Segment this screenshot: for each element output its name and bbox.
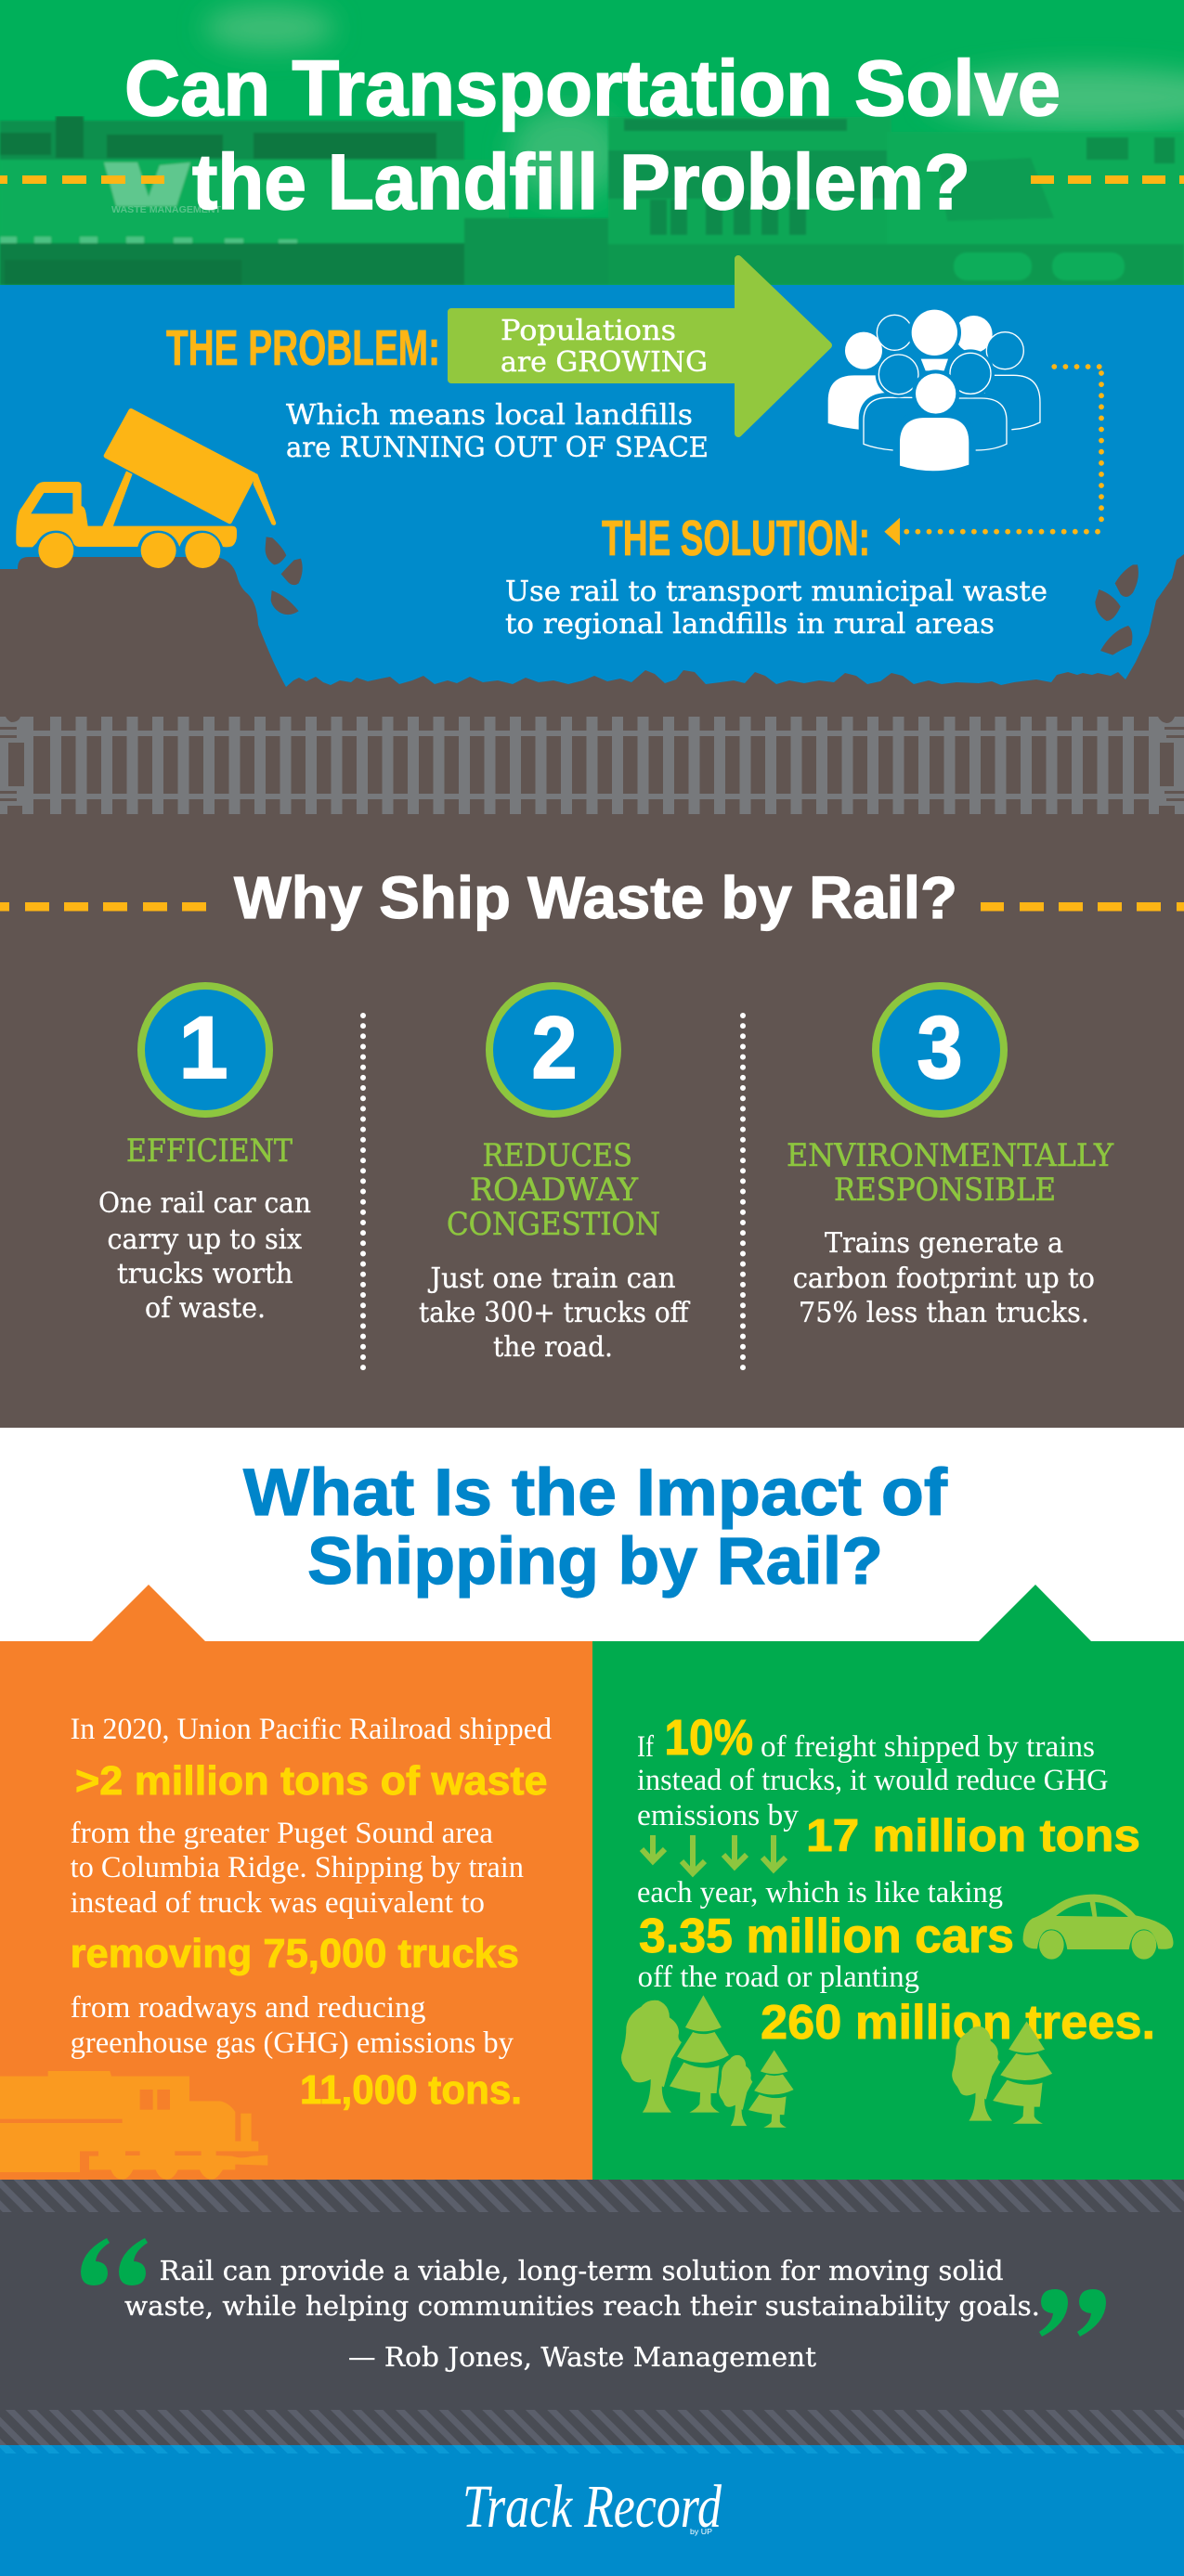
text: green panel highlights: 260 million trees. <box>761 1996 1155 2050</box>
text: quote: Rail can provide a viable, long-term solution for moving solid <box>160 2255 1003 2286</box>
logo: track record by UP: by UP <box>690 2528 712 2536</box>
text: green panel copy: each year, which is like taking <box>637 1876 1003 1909</box>
reason 2: reduces roadway congestion: take 300+ trucks off <box>419 1297 691 1329</box>
reason 2: reduces roadway congestion: CONGESTION <box>447 1206 660 1243</box>
heading: the solution: THE SOLUTION: <box>602 511 870 566</box>
icon: dump truck <box>16 411 276 568</box>
reason 2: reduces roadway congestion: the road. <box>493 1331 613 1364</box>
icon: falling trash bags right <box>1095 564 1138 655</box>
reason 1: efficient: of waste. <box>145 1292 266 1325</box>
reason 2: reduces roadway congestion <box>419 986 691 1364</box>
arrow: populations growing <box>451 259 828 434</box>
heading: what is the impact <box>243 1456 947 1599</box>
reason 3: environmentally responsible: 3 <box>917 999 962 1097</box>
text: orange panel copy: instead of truck was equivalent to <box>71 1886 485 1920</box>
arrow: populations growing: Populations <box>501 315 676 347</box>
reason 3: environmentally responsible <box>787 986 1114 1329</box>
reason 2: reduces roadway congestion: ROADWAY <box>470 1171 639 1209</box>
divider dots <box>740 1016 746 1378</box>
reason 3: environmentally responsible: Trains generate a <box>825 1227 1063 1260</box>
arrow: dotted line from crowd to solution <box>884 367 1101 546</box>
text: quote: — Rob Jones, Waste Management <box>348 2341 816 2373</box>
text: green panel highlights: 10% <box>665 1710 753 1766</box>
text: running out of space <box>286 399 709 464</box>
panel: blue footer <box>0 2445 1184 2576</box>
text: solution description <box>505 576 1047 641</box>
decoration: header dashed road line <box>0 175 1184 184</box>
text: orange panel highlights: >2 million tons of waste <box>75 1758 548 1804</box>
reason 1: efficient: trucks worth <box>117 1258 293 1290</box>
arrow: populations growing: are GROWING <box>501 346 708 379</box>
reason 3: environmentally responsible: 75% less than trucks. <box>799 1297 1089 1329</box>
reason 2: reduces roadway congestion: Just one train can <box>427 1262 676 1295</box>
heading: the problem: THE PROBLEM: <box>166 320 440 376</box>
heading: what is the impact: Shipping by Rail? <box>307 1525 883 1599</box>
text: green panel copy: emissions by <box>637 1799 799 1832</box>
title: Can Transportation Solve <box>124 45 1060 132</box>
railroad track <box>0 717 1184 814</box>
text: green panel highlights: 3.35 million cars <box>639 1909 1014 1963</box>
text: solution description: to regional landfills in rural areas <box>505 608 995 641</box>
panel: header with green locomotive photo: WASTE MANAGEMENT <box>111 205 221 215</box>
panel: white impact heading band <box>0 1428 1184 1641</box>
text: green panel copy: instead of trucks, it would reduce GHG <box>637 1764 1109 1797</box>
reason 3: environmentally responsible: ENVIRONMENTALLY <box>787 1137 1114 1174</box>
text: green panel copy: off the road or planting <box>638 1961 919 1994</box>
text: orange panel highlights <box>71 1758 548 2113</box>
text: running out of space: Which means local landfills <box>286 399 693 432</box>
icon: opening quote marks <box>81 2238 148 2285</box>
panel: brown why ship by rail background <box>0 703 1184 1428</box>
reason 1: efficient: 1 <box>179 999 228 1097</box>
text: orange panel copy: from roadways and reducing <box>71 1991 425 2025</box>
logo: track record by UP: Track Record <box>462 2473 722 2541</box>
icon: down arrows <box>642 1835 786 1873</box>
reason 2: reduces roadway congestion: 2 <box>531 999 578 1097</box>
text: green panel highlights <box>639 1710 1155 2050</box>
panel: green emissions stats <box>592 1585 1184 2180</box>
icon: falling trash bags left <box>266 537 303 615</box>
text: orange panel copy: to Columbia Ridge. Shipping by train <box>71 1851 524 1884</box>
icon: trees right group <box>952 2021 1052 2124</box>
heading: what is the impact: What Is the Impact of <box>243 1456 947 1530</box>
text: orange panel highlights: 11,000 tons. <box>300 2067 522 2113</box>
text: green panel copy: If <box>637 1730 654 1764</box>
icon: trees left group <box>621 1995 794 2128</box>
icon: car <box>1023 1895 1173 1960</box>
panel: orange union pacific stats <box>0 1585 592 2180</box>
text: green panel copy <box>637 1730 1109 1994</box>
reason 2: reduces roadway congestion: REDUCES <box>483 1137 632 1174</box>
text: green panel copy: of freight shipped by trains <box>761 1730 1095 1764</box>
text: quote: waste, while helping communities reach their sustainability goals. <box>124 2290 1040 2322</box>
icon: crowd of people <box>828 306 1040 471</box>
reason 3: environmentally responsible: carbon footprint up to <box>793 1262 1095 1295</box>
text: orange panel copy: greenhouse gas (GHG) emissions by <box>71 2026 514 2060</box>
icon: locomotive silhouette <box>0 2071 267 2180</box>
text: quote <box>124 2255 1040 2373</box>
heading: why ship waste by rail <box>0 864 1184 931</box>
divider dots <box>360 1016 366 1378</box>
reason 1: efficient <box>98 986 311 1325</box>
title <box>124 45 1060 226</box>
reason 3: environmentally responsible: RESPONSIBLE <box>834 1171 1056 1209</box>
panel: header with green locomotive photo <box>0 0 1184 285</box>
title: the Landfill Problem? <box>192 138 970 226</box>
text: green panel highlights: 17 million tons <box>806 1811 1140 1861</box>
text: solution description: Use rail to transport municipal waste <box>505 576 1047 608</box>
reason 1: efficient: carry up to six <box>108 1223 302 1256</box>
icon: closing quote marks <box>1039 2289 1106 2337</box>
panel: dark quote band <box>0 2180 1184 2445</box>
text: orange panel copy <box>71 1713 552 2060</box>
text: orange panel copy: In 2020, Union Pacific Railroad shipped <box>71 1713 552 1746</box>
text: orange panel highlights: removing 75,000 trucks <box>71 1931 519 1976</box>
reason 1: efficient: EFFICIENT <box>126 1133 293 1170</box>
panel: blue problem and solution background <box>0 285 1184 703</box>
text: running out of space: are RUNNING OUT OF SPACE <box>286 432 709 464</box>
heading: why ship waste by rail: Why Ship Waste by Rail? <box>234 864 957 931</box>
reason 1: efficient: One rail car can <box>98 1187 311 1220</box>
text: orange panel copy: from the greater Puget Sound area <box>71 1817 493 1850</box>
landfill ground and hills <box>0 554 1184 733</box>
